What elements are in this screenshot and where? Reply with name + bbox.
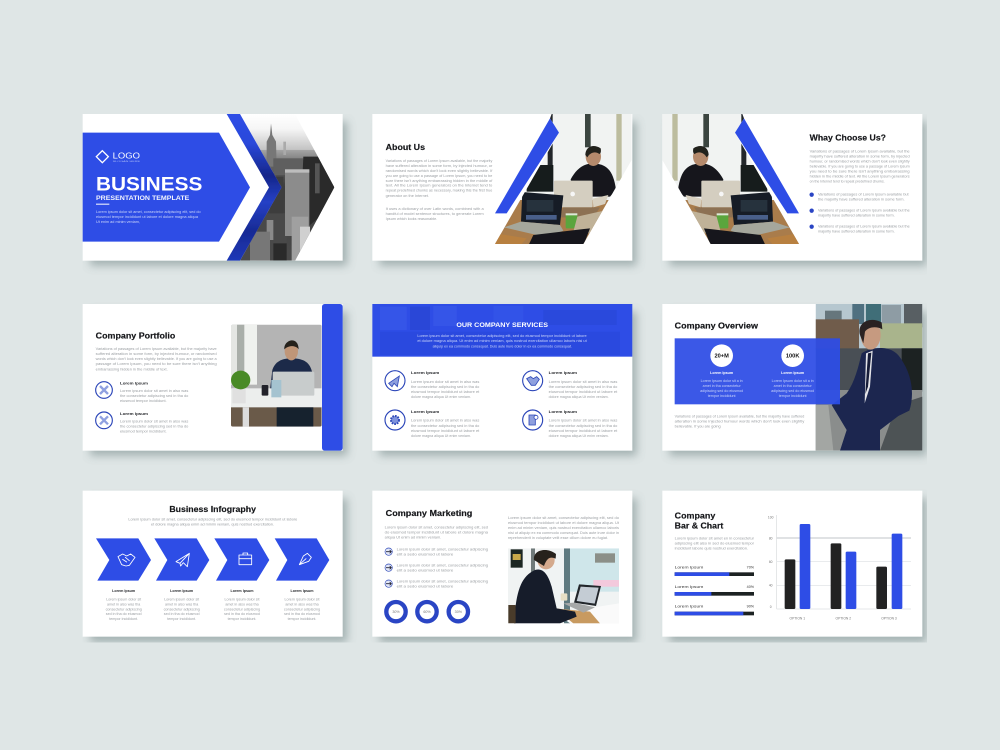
step 4: pen tool: amet in also was tha [285, 602, 320, 606]
body text: incididunt labore quis nostrud exercitation. [675, 546, 748, 550]
step 3: briefcase: tempor incididunt. [228, 617, 256, 621]
arrow bullet list: Lorem ipsum dolor sit amet, consectetur adipiscing [397, 579, 488, 583]
progress bar: 40%: 40% [747, 585, 755, 589]
heading [675, 512, 724, 530]
right text: Lorem ipsum dolor sit amet, consectetur adipiscing elit, sed do [508, 516, 619, 520]
body text: have suffered alteration in some form, by injected humour, or [386, 164, 493, 168]
feature text: eiusmod tempor incididunt. [120, 430, 167, 434]
description [96, 210, 201, 224]
body text: hidden in the middle of text. All the Lorem Ipsum generators [810, 175, 910, 179]
right text: eiusmod tempor incididunt ut labore et dolore magna aliqua. Ut [508, 521, 619, 525]
slide: our company services [372, 304, 637, 456]
body text: adipiscing elit also in sed do eiusmod tempor [675, 541, 755, 545]
body text: sure there isn't anything embarrassing hidden in the middle of [386, 179, 493, 183]
intro text: Lorem ipsum dolor sit amet, consectetur adipiscing elit, sed do eiusmod tempor incididunt ut labore [128, 518, 297, 522]
body text: Ipsum which looks reasonable. [386, 217, 437, 221]
slide: company marketing [372, 491, 637, 642]
left text [385, 526, 489, 540]
bar chart: OPTION 2 [836, 617, 851, 621]
body text: Lorem ipsum dolor sit amet en in consectetur [675, 536, 755, 540]
photo: businessman in suit [816, 304, 922, 451]
bar chart: 100 [768, 516, 774, 520]
service: handshake: the consectetur adipiscing sed in tha do [549, 385, 617, 389]
photo: city skyline [240, 124, 334, 260]
heading: Business Infography [169, 505, 257, 514]
blue header band [372, 304, 632, 357]
service: paper plane: the consectetur adipiscing sed in tha do [411, 385, 479, 389]
photo: man with laptop in cafe [508, 548, 619, 623]
service: paper plane [385, 371, 480, 399]
feature text: the consectetur adipiscing sed in tha do [120, 394, 188, 398]
intro text: et dolore magna aliqua. Ut enim ad minim veniam, quis nostrud exercitation ullamco laboris nisi ut [417, 339, 587, 343]
service: gear: the consectetur adipiscing sed in tha do [411, 424, 479, 428]
donut: 30% [386, 602, 406, 621]
donut: 60% [417, 602, 437, 621]
service: document: the consectetur adipiscing sed in tha do [549, 424, 617, 428]
stat: 20+M: amet in tha consectetur [703, 384, 741, 388]
intro text: aliquip ex ea commodo consequat. Duis aute irure dolor in ex ea commodo consequat. [433, 344, 572, 348]
feature text: Lorem ipsum dolor sit amet in also was [120, 389, 189, 393]
step 2: paper plane [154, 538, 209, 621]
service: paper plane: Lorem Ipsum [411, 371, 440, 375]
stat: 100K: Lorem Ipsum [781, 371, 805, 375]
bullet list: majority have suffered alteration in some form. [818, 213, 895, 217]
blue diagonal band [495, 118, 559, 213]
service: document: dolore magna aliqua Ut enim veniam. [549, 434, 609, 438]
logo: LOGO [113, 150, 141, 160]
left text: Lorem ipsum dolor sit amet, consectetur adipiscing elit, sed [385, 526, 488, 530]
bar chart: 80 [769, 536, 773, 540]
body text: Variations of passages of Lorem Ipsum available, but the [810, 150, 910, 154]
body text: embarrassing hidden in the middle of text. [96, 367, 168, 371]
heading: Whay Choose Us? [810, 134, 886, 143]
body text: Variations of passages of Lorem Ipsum available, but the majority have [96, 347, 217, 351]
step 4: pen tool: consectetur adipiscing [284, 607, 320, 611]
step 3: briefcase: Lorem ipsum dolor sit [225, 597, 259, 601]
description: Lorem ipsum dolor sit amet, consectetur adipiscing elit, sed do [96, 210, 201, 214]
bar chart: 0 [770, 605, 772, 609]
slide: why choose us [661, 114, 927, 266]
feature text [120, 412, 189, 434]
donut: 30%: 30% [392, 610, 400, 614]
step 1: handshake: Lorem ipsum dolor sit [106, 597, 141, 601]
service: handshake: Lorem ipsum dolor sit amet in also was [549, 380, 618, 384]
slide: company overview [662, 304, 927, 456]
bullet list [809, 192, 910, 233]
slide: about us [372, 114, 637, 266]
service: paper plane: Lorem ipsum dolor sit amet in also was [411, 380, 480, 384]
intro text: et dolore magna aliqua enim ad minim veniam, quis nostrud exercitation. [151, 523, 274, 527]
donut: 60%: 60% [423, 610, 431, 614]
feature text: Lorem Ipsum [120, 412, 149, 416]
arrow bullet list [385, 547, 488, 588]
body text [386, 159, 493, 221]
body text: you are going to use a passage of Lorem Ipsum, you need to be [386, 174, 492, 178]
bar chart: OPTION 1 [790, 617, 805, 621]
step 2: paper plane: Lorem Ipsum [170, 589, 194, 593]
progress bar: 70% [675, 566, 755, 576]
step 4: pen tool [275, 538, 329, 621]
stat: 20+M: Lorem Ipsum [710, 371, 734, 375]
arrow bullet list: elit a sedo eiusmod ut labore [397, 584, 453, 588]
service: document: Lorem Ipsum [549, 410, 578, 414]
body text: majority have suffered alteration in some form, by injected [810, 155, 910, 159]
service: handshake: Lorem Ipsum [549, 371, 578, 375]
body text [675, 415, 805, 429]
stat: 20+M: 20+M [715, 354, 729, 360]
feature text: eiusmod tempor incididunt. [120, 399, 167, 403]
stat: 20+M: Lorem Ipsum dolor sit a in [701, 379, 743, 383]
subtitle: PRESENTATION TEMPLATE [96, 195, 190, 202]
progress bar: 90%: 90% [747, 605, 755, 609]
icon: tools [96, 412, 112, 429]
step 3: briefcase [214, 538, 269, 621]
description: Ut enim ad minim veniam, [96, 220, 140, 224]
bar chart: OPTION 3 [881, 617, 897, 621]
right text [508, 516, 619, 540]
slide: business title [83, 114, 347, 266]
slide: business infography [83, 491, 347, 642]
right text: nisi ut aliquip ex ea commodo consequat. Duis aute irure dolor in [508, 531, 619, 535]
body text: passage of Lorem Ipsum, you need to be sure there isn't anything [96, 362, 217, 366]
title: BUSINESS [96, 175, 202, 196]
blue side panel [322, 304, 343, 451]
step 4: pen tool: tempor incididunt. [288, 617, 316, 621]
bar chart: 60 [769, 560, 773, 564]
bar chart [768, 515, 911, 621]
donut: 30%: 30% [455, 610, 463, 614]
blue diagonal band [735, 118, 799, 213]
heading: Company Marketing [386, 509, 472, 518]
service: handshake: eiusmod tempor incididunt ut labore et [549, 390, 617, 394]
slide: company bar and chart [662, 491, 927, 642]
step 1: handshake [96, 538, 151, 621]
bullet list: majority have suffered alteration in some form. [818, 229, 895, 233]
donut: 30% [449, 602, 468, 621]
service: handshake: dolore magna aliqua Ut enim veniam. [549, 395, 609, 399]
body text: randomised words which don't look even slightly believable. If [386, 169, 493, 173]
progress bar: 70%: Lorem Ipsum [675, 566, 703, 570]
photo: man at desk [231, 325, 322, 427]
intro text: Lorem ipsum dolor sit amet, consectetur adipiscing elit, sed do eiusmod tempor incididunt ut labore [417, 334, 587, 338]
photo: team at laptops mirrored [661, 114, 801, 246]
progress bar: 90%: Lorem Ipsum [675, 605, 703, 609]
right text: enim ad minim veniam, quis nostrud exercitation ullamco laboris [508, 526, 619, 530]
arrow bullet list: Lorem ipsum dolor sit amet, consectetur adipiscing [397, 547, 488, 551]
body text: believable. If you are going to use a passage of Lorem Ipsum [810, 165, 910, 169]
service: gear: Lorem ipsum dolor sit amet in also was [411, 419, 480, 423]
service: document [523, 410, 618, 438]
step 2: paper plane: tempor incididunt. [167, 617, 196, 621]
photo: team at laptops [493, 114, 633, 246]
service: paper plane: eiusmod tempor incididunt ut labore et [411, 390, 479, 394]
logo [96, 150, 141, 163]
body text: on the Internet tend to repeat predefined chunks. [810, 180, 885, 184]
stat: 100K: amet in tha consectetur [774, 384, 812, 388]
step 3: briefcase: Lorem Ipsum [231, 589, 254, 593]
step 1: handshake: consectetur adipiscing [106, 607, 142, 611]
stat: 100K [771, 344, 814, 398]
body text: you need to be sure there isn't anything embarrassing [810, 170, 910, 174]
blue chevron band [227, 114, 282, 261]
stat: 20+M [700, 344, 743, 398]
service: gear: Lorem Ipsum [411, 410, 440, 414]
stat: 100K: Lorem Ipsum dolor sit a in [772, 379, 814, 383]
step 3: briefcase: consectetur adipiscing [224, 607, 260, 611]
step 3: briefcase: amet in also was tha [225, 602, 260, 606]
step 2: paper plane: consectetur adipiscing [164, 607, 200, 611]
service: gear [385, 410, 480, 438]
bullet list: the majority have suffered alteration in some form. [818, 197, 905, 201]
stat: 100K: tempor incididunt [779, 394, 807, 398]
body text: repeat predefined chunks as necessary, making this the first true [386, 189, 492, 193]
stat: 20+M: tempor incididunt [708, 394, 736, 398]
arrow bullet list: elit a sedo eiusmod ut labore [397, 552, 453, 556]
step 1: handshake: Lorem Ipsum [112, 589, 136, 593]
heading: Company Overview [675, 321, 759, 330]
service: document: Lorem ipsum dolor sit amet in also was [549, 419, 618, 423]
step 1: handshake: tempor incididunt. [109, 617, 138, 621]
body text: humour, or randomised words which don't look even slightly [810, 160, 910, 164]
step 4: pen tool: Lorem Ipsum [291, 589, 314, 593]
step 2: paper plane: sed in tha do eiusmod [164, 612, 200, 616]
icon: tools [96, 382, 112, 398]
step 4: pen tool: Lorem ipsum dolor sit [285, 597, 319, 601]
bullet list: Variations of passages of Lorem Ipsum available but the [818, 208, 910, 212]
arrow bullet list: Lorem ipsum dolor sit amet, consectetur adipiscing [397, 563, 488, 567]
progress bar: 90% [675, 605, 755, 615]
heading: Company Portfolio [96, 332, 175, 341]
step 4: pen tool: sed in tha do eiusmod [284, 612, 320, 616]
stat: 100K: adipiscing sed do eiusmod [771, 389, 814, 393]
body text [810, 150, 910, 184]
body text: It uses a dictionary of over Latin words, combined with a [386, 207, 485, 211]
intro text [417, 334, 587, 348]
stat: 100K: 100K [786, 354, 800, 360]
body text: text. All the Lorem Ipsum generators on the Internet tend to [386, 184, 492, 188]
blue stats panel [675, 338, 840, 404]
body text: believable. If you are going [675, 425, 721, 429]
step 2: paper plane: Lorem ipsum dolor sit [164, 597, 199, 601]
logo: SLOGAN HERE [113, 160, 141, 163]
progress bar: 70%: 70% [747, 566, 755, 570]
step 1: handshake: amet in also was tha [107, 602, 141, 606]
step 3: briefcase: sed in tha do eiusmod [224, 612, 260, 616]
feature text: Lorem Ipsum [120, 382, 149, 386]
heading: Bar & Chart [675, 521, 724, 530]
body text [675, 536, 755, 550]
service: gear: dolore magna aliqua Ut enim veniam. [411, 434, 471, 438]
slide: company portfolio [83, 304, 347, 456]
heading: About Us [386, 143, 426, 152]
feature text [120, 382, 189, 403]
stat: 20+M: adipiscing sed do eiusmod [700, 389, 743, 393]
body text: Variations of passages of Lorem Ipsum available, but the majority have suffered [675, 415, 804, 419]
body text: Variations of passages of Lorem Ipsum available, but the majority [386, 159, 492, 163]
body text [96, 347, 218, 371]
body text: words which don't look even slightly believable. If you are going to use a [96, 357, 218, 361]
body text: generator on the Internet. [386, 194, 429, 198]
body text: suffered alteration in some form, by injected humour, or randomised [96, 352, 217, 356]
bullet list: Variations of passages of Lorem Ipsum available but [818, 192, 909, 196]
left text: do eiusmod tempor incididunt ut labore et dolore magna [385, 531, 489, 535]
service: gear: eiusmod tempor incididunt ut labore et [411, 429, 479, 433]
service: handshake [523, 371, 618, 399]
intro text [128, 518, 297, 527]
bullet list: Variations of passages of Lorem Ipsum available but the [818, 224, 910, 228]
progress bar: 40% [675, 585, 755, 596]
step 2: paper plane: amet in also was tha [165, 602, 199, 606]
arrow bullet list: elit a sedo eiusmod ut labore [397, 568, 453, 572]
service: paper plane: dolore magna aliqua Ut enim veniam. [411, 395, 471, 399]
heading: Company [675, 512, 716, 521]
bar chart: 40 [769, 584, 773, 588]
heading: OUR COMPANY SERVICES [456, 322, 548, 329]
service: document: eiusmod tempor incididunt ut labore et [549, 429, 617, 433]
progress bar: 40%: Lorem Ipsum [675, 585, 703, 589]
right text: reprehenderit in voluptate velit esse cillum dolore eu fugiat. [508, 536, 608, 540]
blue title panel [83, 133, 250, 242]
left text: aliqua Ut enim ad minim veniam. [385, 536, 441, 540]
feature text: Lorem ipsum dolor sit amet in also was [120, 419, 189, 423]
body text: handful of model sentence structures, to generate Lorem [386, 212, 484, 216]
description: eiusmod tempor incididunt ut labore et dolore magna aliqua [96, 215, 199, 219]
feature text: the consectetur adipiscing sed in tha do [120, 425, 188, 429]
body text: alteration in some injected humour words which don't look even slightly [675, 420, 805, 424]
step 1: handshake: sed in tha do eiusmod [106, 612, 142, 616]
